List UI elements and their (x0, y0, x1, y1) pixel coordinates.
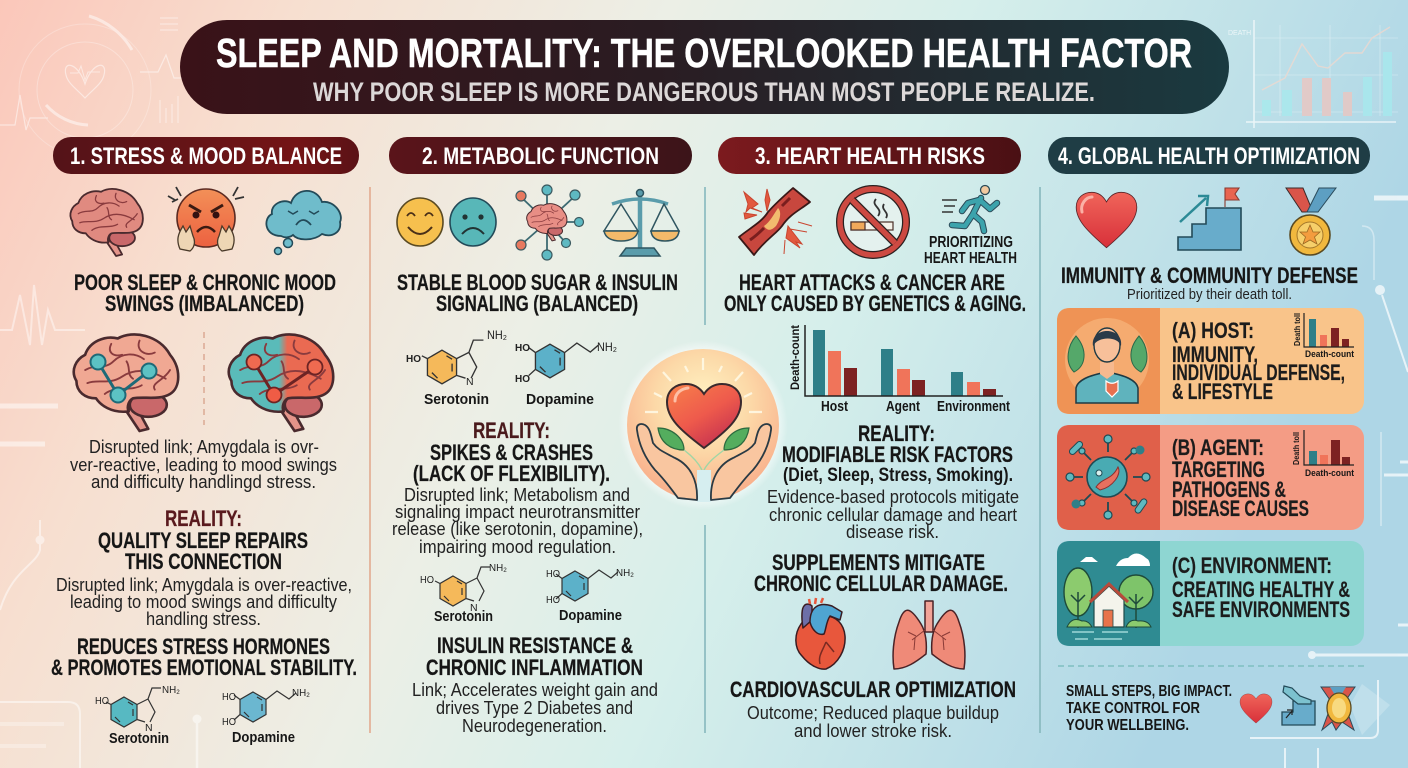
text: immunity heading: Prioritized by their death toll. (1127, 286, 1292, 303)
text: reality 3: (Diet, Sleep, Stress, Smoking). (783, 465, 1013, 486)
text: reality 2: SPIKES & CRASHES (430, 440, 593, 465)
text: reality 2 (413, 418, 610, 486)
bar chart: death count: Agent (886, 398, 920, 415)
text: body 2: impairing mood regulation. (419, 536, 616, 557)
heading pill 3 (718, 137, 1021, 174)
heading pill 1 (53, 137, 359, 174)
label: prioritizing heart health: PRIORITIZING (929, 234, 1013, 251)
text: heart attacks myth: HEART ATTACKS & CANCER ARE (739, 270, 1005, 295)
molecule: serotonin middle: HO (420, 574, 434, 586)
text: environment: (C) ENVIRONMENT: (1172, 553, 1332, 578)
text: outcome (747, 702, 999, 741)
text: reality 3: REALITY: (858, 421, 935, 446)
text: heart attacks myth (724, 270, 1026, 316)
icon: balance scale (604, 190, 679, 256)
center icon: heart in hands (618, 340, 788, 510)
text: body 2 (392, 484, 643, 557)
card: host (1057, 308, 1364, 414)
icon: sad cloud (266, 191, 341, 254)
decoration: top-right chart: DEATH (1228, 30, 1251, 37)
bar chart: death count: Host (821, 398, 848, 415)
text: body 1: Disrupted link; Amygdala is over-reactive, (56, 574, 352, 595)
icon: house and trees (1064, 554, 1153, 639)
molecule: dopamine top: Dopamine (526, 391, 594, 408)
molecule: serotonin: N (145, 722, 153, 734)
icon: runner (924, 186, 1017, 267)
text: body 3: chronic cellular damage and heart (769, 504, 1017, 525)
molecule: dopamine middle: NH₂ (616, 567, 634, 579)
text: insulin resistance: INSULIN RESISTANCE & (437, 633, 633, 658)
text: stable blood sugar: SIGNALING (BALANCED) (436, 291, 638, 316)
heading pill 3: 3. HEART HEALTH RISKS (755, 143, 985, 170)
text: body 2: signaling impact neurotransmitter (395, 501, 640, 522)
icon: medal (1286, 188, 1336, 255)
dashed divider (1058, 665, 1364, 667)
text: stable blood sugar (397, 270, 678, 316)
mini chart: agent: Death-count (1305, 468, 1354, 478)
text: reduces stress: REDUCES STRESS HORMONES (77, 634, 330, 659)
card: host: INDIVIDUAL DEFENSE, (1172, 360, 1345, 385)
subtitle: WHY POOR SLEEP IS MORE DANGEROUS THAN MOST PEOPLE REALIZE. (313, 77, 1095, 107)
text: host: (A) HOST: (1172, 318, 1254, 343)
text: small steps: TAKE CONTROL FOR (1066, 700, 1200, 717)
heart (667, 384, 741, 448)
text: body 3: Evidence-based protocols mitigate (767, 486, 1019, 507)
left hand (637, 424, 697, 500)
text: link body: Neurodegeneration. (462, 715, 607, 736)
text: outcome: Outcome; Reduced plaque buildup (747, 702, 999, 723)
text: supplements: SUPPLEMENTS MITIGATE (772, 550, 985, 575)
molecule: serotonin top: N (466, 376, 474, 388)
molecule: serotonin: HO (95, 695, 109, 707)
icon: happy face (397, 198, 443, 246)
molecule: serotonin top: HO (406, 353, 421, 365)
text: reality 3: MODIFIABLE RISK FACTORS (782, 442, 1013, 467)
dashed divider between brains (203, 332, 205, 425)
card: agent: TARGETING (1172, 457, 1265, 482)
molecule: dopamine middle: HO (546, 594, 560, 606)
heading pill 1: 1. STRESS & MOOD BALANCE (70, 143, 342, 170)
right hand (711, 424, 771, 500)
mini chart: host: Death-count (1305, 349, 1354, 359)
card: host: IMMUNITY, (1172, 342, 1258, 367)
text: reality 3 (782, 421, 1013, 486)
text: reality 1 (98, 506, 308, 574)
molecule: dopamine: Dopamine (232, 729, 295, 746)
text: stable blood sugar: STABLE BLOOD SUGAR & INSULIN (397, 270, 678, 295)
text: small steps (1066, 683, 1232, 734)
text: reduces stress: & PROMOTES EMOTIONAL STABILITY. (51, 655, 357, 680)
molecule: dopamine middle (546, 567, 634, 624)
icon: over-reactive brain (229, 334, 333, 431)
card: agent (1057, 425, 1364, 530)
mini chart: agent: Death toll (1292, 432, 1301, 465)
molecule: serotonin: NH₂ (162, 684, 180, 696)
icon: lungs (893, 601, 965, 669)
card: environment: SAFE ENVIRONMENTS (1172, 597, 1350, 622)
text: body 3: disease risk. (846, 521, 939, 542)
title banner (180, 20, 1229, 114)
text: insulin resistance: CHRONIC INFLAMMATION (426, 655, 643, 680)
icon: damaged artery (739, 188, 812, 255)
decoration: top-left heart monitor (0, 16, 201, 768)
icon: small medal (1321, 687, 1355, 730)
molecule: dopamine top (515, 340, 617, 408)
heading pill 4 (1048, 137, 1370, 174)
bar chart: death count: Death-count (788, 325, 802, 390)
molecule: dopamine middle: HO (546, 568, 560, 580)
text: reduces stress (51, 634, 357, 680)
icon: angry face (168, 187, 244, 251)
text: small steps: SMALL STEPS, BIG IMPACT. (1066, 683, 1232, 700)
molecule: serotonin middle (420, 562, 507, 625)
molecule: serotonin (95, 684, 180, 747)
molecule: serotonin middle: NH₂ (489, 562, 507, 574)
molecule: dopamine top: HO (515, 342, 530, 354)
text: poor sleep heading: POOR SLEEP & CHRONIC MOOD (74, 270, 336, 295)
molecule: dopamine middle: Dopamine (559, 607, 622, 624)
card: agent: DISEASE CAUSES (1172, 496, 1309, 521)
icon: imbalanced brain (74, 334, 178, 431)
text: poor sleep heading: SWINGS (IMBALANCED) (105, 291, 304, 316)
text: reality 1: QUALITY SLEEP REPAIRS (98, 528, 308, 553)
text: agent: (B) AGENT: (1172, 435, 1264, 460)
text: link body (412, 679, 658, 736)
molecule: serotonin top: NH₂ (487, 328, 507, 342)
icon: small heart (1240, 694, 1272, 723)
bar chart: death count: Environment (937, 398, 1010, 415)
card: agent: PATHOGENS & (1172, 477, 1286, 502)
icon: virus (1066, 435, 1150, 519)
icon: runner: HEART HEALTH (924, 250, 1017, 267)
molecule: dopamine: HO (222, 716, 236, 728)
text: disrupted link: Disrupted link; Amygdala is ovr- (89, 436, 319, 457)
text: poor sleep heading (74, 270, 336, 316)
text: body 2: release (like serotonin, dopamine), (392, 518, 643, 539)
molecule: serotonin middle: N (470, 602, 478, 614)
text: outcome: and lower stroke risk. (794, 720, 952, 741)
text: body 3 (767, 486, 1019, 542)
molecule: serotonin middle: Serotonin (434, 608, 493, 625)
text: disrupted link: and difficulty handlingd stress. (91, 471, 316, 492)
mini chart: agent (1292, 430, 1354, 478)
text: disrupted link (70, 436, 337, 492)
text: link body: Link; Accelerates weight gain and (412, 679, 658, 700)
panel: 1. stress and mood balance (51, 137, 359, 747)
text: insulin resistance (426, 633, 643, 680)
mini chart: host: Death toll (1293, 313, 1302, 346)
decoration: right side glow lines (1250, 198, 1408, 768)
icon: person with shield (1065, 318, 1149, 403)
text: disrupted link: ver-reactive, leading to mood swings (70, 454, 337, 475)
wrist gap (697, 470, 711, 502)
heading pill 2 (389, 137, 692, 174)
molecule: dopamine: NH₂ (292, 687, 310, 699)
icon: anatomical heart (796, 598, 845, 669)
icon: shoe and stairs (1282, 686, 1315, 725)
text: small steps: YOUR WELLBEING. (1066, 717, 1189, 734)
icon: red heart (1076, 192, 1137, 248)
text: body 1: handling stress. (146, 608, 261, 629)
panel: 4. global health optimization (1048, 137, 1370, 734)
molecule: dopamine top: NH₂ (597, 340, 617, 354)
text: reality 2: REALITY: (473, 418, 550, 443)
molecule: dopamine (222, 687, 310, 746)
column dividers (370, 187, 1040, 733)
text: heart attacks myth: ONLY CAUSED BY GENETICS & AGING. (724, 291, 1026, 316)
card: environment: CREATING HEALTHY & (1172, 577, 1350, 602)
text: supplements (754, 550, 1008, 596)
heading pill 2: 2. METABOLIC FUNCTION (422, 143, 659, 170)
card: environment (1057, 541, 1364, 646)
text: cardiovascular optimization: CARDIOVASCULAR OPTIMIZATION (730, 677, 1016, 702)
text: immunity heading (1061, 263, 1358, 303)
text: body 2: Disrupted link; Metabolism and (404, 484, 630, 505)
panel: 2. metabolic function (389, 137, 692, 736)
icon: brain network (516, 185, 584, 260)
text: supplements: CHRONIC CELLULAR DAMAGE. (754, 571, 1008, 596)
text: body 1 (56, 574, 352, 629)
icon: sad face (450, 198, 496, 246)
molecule: dopamine: HO (222, 691, 236, 703)
text: reality 2: (LACK OF FLEXIBILITY). (413, 461, 610, 486)
decoration: top-right chart (1228, 20, 1398, 128)
icon: no smoking (840, 189, 906, 255)
icon: brain (70, 189, 143, 256)
icon: stairs with flag (1178, 188, 1241, 250)
text: reality 1: REALITY: (165, 506, 242, 531)
molecule: serotonin top (406, 328, 507, 408)
text: reality 1: THIS CONNECTION (125, 549, 282, 574)
panel: 3. heart health risks (718, 137, 1026, 741)
molecule: dopamine top: HO (515, 373, 530, 385)
molecule: serotonin: Serotonin (109, 730, 169, 747)
mini chart: host (1293, 313, 1354, 359)
text: link body: drives Type 2 Diabetes and (436, 697, 633, 718)
molecule: serotonin top: Serotonin (424, 391, 489, 408)
text: body 1: leading to mood swings and difficulty (70, 591, 338, 612)
bar chart: death count (788, 325, 1010, 415)
card: host: & LIFESTYLE (1172, 379, 1273, 404)
leaves (658, 428, 684, 450)
